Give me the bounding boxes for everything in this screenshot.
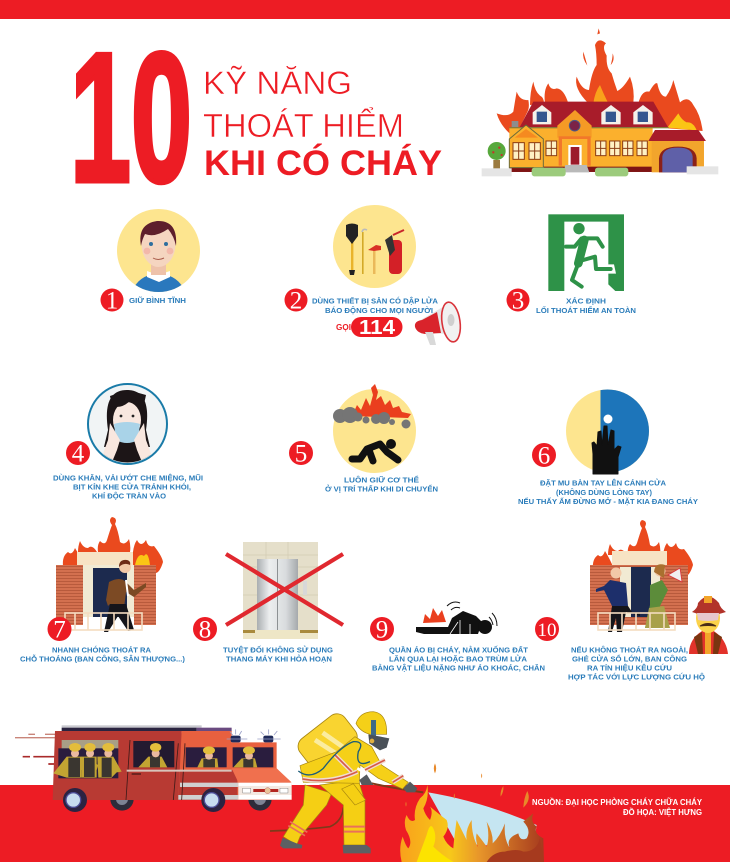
badge 2 (284, 288, 308, 314)
flames (400, 785, 544, 862)
icon: woman with mask (88, 384, 167, 464)
firefighter with hose (270, 710, 544, 862)
icon: calm man (117, 209, 200, 296)
windows (513, 141, 647, 159)
text 10: NẾU KHÔNG THOÁT RA NGOÀI, (571, 644, 688, 654)
step 2: firefighting tools (284, 205, 463, 345)
call 114: GỌI (336, 323, 351, 332)
step 10: signal for help (535, 520, 728, 682)
title: KHI CÓ CHÁY (204, 143, 442, 183)
text 6: NẾU THẤY ẤM ĐỪNG MỞ - MẶT KIA ĐANG CHÁY (518, 496, 698, 506)
text 1: GIỮ BÌNH TĨNH (129, 296, 186, 305)
call 114: 114 (359, 317, 396, 339)
fire truck (15, 725, 292, 812)
left gable (509, 125, 543, 168)
badge 10 (535, 617, 559, 641)
fences and bushes (482, 168, 512, 176)
text 7 (20, 646, 185, 664)
text 9: QUẦN ÁO BỊ CHÁY, NẰM XUỐNG ĐẤT (389, 644, 528, 654)
icon: tools (333, 205, 416, 288)
helmet and mask (356, 712, 387, 734)
dormers (533, 105, 551, 124)
step 8: no elevator (193, 542, 343, 664)
roof rails (62, 725, 202, 728)
tank (294, 710, 361, 774)
centre gable (557, 110, 592, 138)
text 10 (568, 644, 705, 682)
icon: crawling person under smoke (333, 384, 416, 473)
front wheels (63, 788, 225, 812)
text 4: BỊT KÍN KHE CỬA TRÁNH KHÓI, (73, 482, 191, 492)
badge 9: 9 (376, 616, 388, 644)
text 8: TUYỆT ĐỐI KHÔNG SỬ DỤNG (223, 644, 333, 654)
text 8: THANG MÁY KHI HỎA HOẠN (226, 654, 332, 664)
icon: exit sign (548, 214, 624, 291)
badge 8: 8 (199, 616, 211, 644)
text 9: BẰNG VẬT LIỆU NẶNG NHƯ ÁO KHOÁC, CHĂN (372, 664, 545, 672)
rear hidden wheels (110, 787, 272, 811)
source credit: ĐỒ HỌA: VIỆT HƯNG (623, 807, 702, 817)
step 7: escape to open area (20, 517, 185, 664)
boots and gloves (280, 838, 302, 848)
step 5: stay low (289, 384, 438, 494)
title: KỸ NĂNG (203, 65, 352, 101)
sirens (231, 736, 241, 742)
title (70, 14, 442, 220)
badge 6: 6 (538, 442, 550, 470)
text 5: Ở VỊ TRÍ THẤP KHI DI CHUYỂN (325, 484, 438, 494)
call 114 (336, 317, 402, 339)
step 9: roll on ground (370, 602, 545, 672)
title: THOÁT HIỂM (203, 107, 404, 144)
body (53, 731, 182, 800)
badge 4 (66, 440, 90, 468)
text 10: GHÉ CỬA SỔ LỚN, BAN CÔNG (572, 654, 687, 664)
step 1: keep calm (100, 209, 200, 314)
badge 7: 7 (53, 616, 66, 644)
icon: firefighter mascot (689, 596, 728, 654)
text 4 (53, 474, 203, 500)
tree (488, 142, 506, 160)
badge 10: 10 (538, 620, 556, 641)
text 8 (223, 644, 333, 664)
text 9: LĂN QUA LẠI HOẶC BAO TRÙM LỬA (389, 654, 528, 664)
text 2: BÁO ĐỘNG CHO MỌI NGƯỜI (325, 306, 433, 315)
text 7: NHANH CHÓNG THOÁT RA (52, 646, 152, 654)
text 4: DÙNG KHĂN, VẢI ƯỚT CHE MIỆNG, MŨI (53, 474, 203, 482)
text 2: DÙNG THIẾT BỊ SẴN CÓ DẬP LỬA (312, 296, 439, 306)
icon: person rolling (416, 602, 497, 634)
text 6: (KHÔNG DÙNG LÒNG TAY) (556, 488, 652, 497)
windows (62, 740, 118, 749)
step 4: cover mouth (53, 384, 203, 500)
bottom red band (0, 785, 730, 862)
text 3: LỐI THOÁT HIỂM AN TOÀN (536, 305, 636, 315)
text 10: HỢP TÁC VỚI LỰC LƯỢNG CỨU HỘ (568, 672, 705, 682)
badge 1: 1 (106, 288, 118, 314)
icon: megaphone (415, 301, 463, 345)
step 3: exit sign (506, 214, 636, 315)
sparks (405, 763, 529, 808)
icon: couple at window with megaphone (590, 520, 693, 632)
text 3 (536, 296, 636, 315)
badge 6 (532, 442, 556, 470)
text 6 (518, 478, 698, 506)
burning house illustration (482, 28, 718, 176)
badge 3: 3 (512, 288, 524, 314)
garage (652, 141, 704, 172)
badge 4: 4 (72, 440, 85, 468)
icon: crossed elevator (226, 542, 343, 639)
crew (53, 757, 257, 778)
icon: man running on balcony (56, 517, 163, 632)
badge 5: 5 (295, 440, 307, 468)
text 6: ĐẶT MU BÀN TAY LÊN CÁNH CỬA (540, 478, 667, 488)
source credit: NGUỒN: ĐẠI HỌC PHÒNG CHÁY CHỮA CHÁY (532, 797, 703, 807)
breathing hose (298, 742, 370, 775)
walls (509, 128, 653, 168)
water spray (428, 792, 537, 848)
text 5 (325, 476, 438, 494)
step 6: test door (518, 388, 698, 506)
chimney (512, 121, 518, 136)
text 2 (312, 296, 439, 315)
icon: hand on door (566, 388, 650, 474)
badge 8 (193, 616, 217, 644)
badge 7 (48, 616, 72, 644)
title: 10 (70, 14, 192, 220)
badge 9 (370, 616, 394, 644)
left leg (283, 785, 332, 845)
source credit (532, 797, 703, 817)
badge 2: 2 (290, 288, 302, 314)
text 3: XÁC ĐỊNH (566, 296, 606, 306)
text 4: KHÍ ĐỘC TRÀN VÀO (92, 492, 166, 500)
badge 5 (289, 440, 313, 468)
top red bar (0, 0, 730, 19)
text 7: CHỖ THOÁNG (BAN CÔNG, SÂN THƯỢNG...) (20, 654, 185, 664)
text 9 (372, 644, 545, 672)
torso and arm (300, 737, 408, 789)
text 10: RA TÍN HIỆU KÊU CỨU (587, 664, 673, 672)
text 5: LUÔN GIỮ CƠ THỂ (344, 476, 419, 484)
roof (519, 102, 668, 128)
right leg (320, 780, 365, 845)
